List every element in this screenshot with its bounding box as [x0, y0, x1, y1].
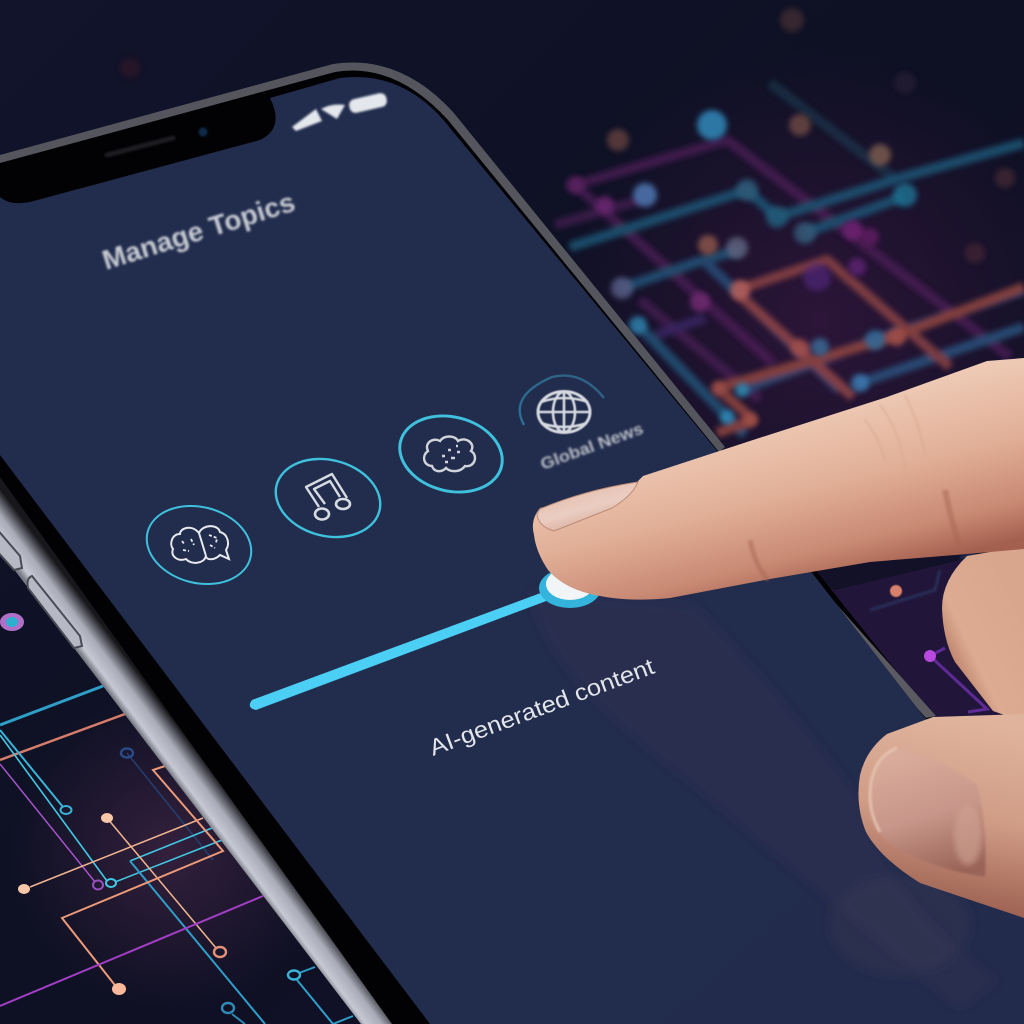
nail rim	[870, 748, 897, 832]
slider thumb	[539, 568, 601, 608]
label: global news: Global News	[538, 419, 646, 474]
hand: index finger	[533, 358, 1024, 600]
speaker	[107, 138, 173, 155]
icon: music topic	[267, 448, 389, 548]
icon: brain topic	[138, 495, 260, 595]
panel glow	[0, 660, 360, 1024]
lunula	[954, 805, 982, 865]
circuit fragment between fingers	[813, 545, 1024, 720]
camera	[198, 128, 208, 136]
caption: AI-generated content	[426, 653, 658, 761]
circuit lines	[0, 686, 353, 1024]
hand: middle finger	[942, 546, 1024, 722]
circuit panel: lower left	[0, 613, 360, 1024]
hand: thumb	[858, 714, 1024, 918]
lower right frame edge	[806, 578, 936, 718]
phone side buttons	[0, 528, 82, 648]
title: Manage Topics	[98, 186, 299, 276]
slider track	[250, 591, 549, 710]
icon: signal	[292, 109, 322, 131]
circuit nodes	[0, 613, 300, 1013]
background glow	[500, 50, 1024, 590]
status icons	[292, 92, 388, 131]
top frame edge	[0, 63, 725, 452]
topic icons	[138, 376, 604, 595]
icon: global news topic	[520, 376, 604, 432]
blurred circuit lines: upper right	[555, 83, 1024, 435]
phone frame	[0, 477, 393, 1024]
icon: cloud topic	[392, 406, 510, 502]
knuckle creases	[750, 395, 962, 580]
icon: wifi	[321, 104, 345, 119]
blurred circuit nodes	[120, 8, 1015, 427]
finger reflection on screen	[530, 590, 1000, 1010]
thumbnail	[871, 748, 986, 877]
fingernail	[537, 482, 638, 531]
icon: battery	[348, 92, 388, 114]
